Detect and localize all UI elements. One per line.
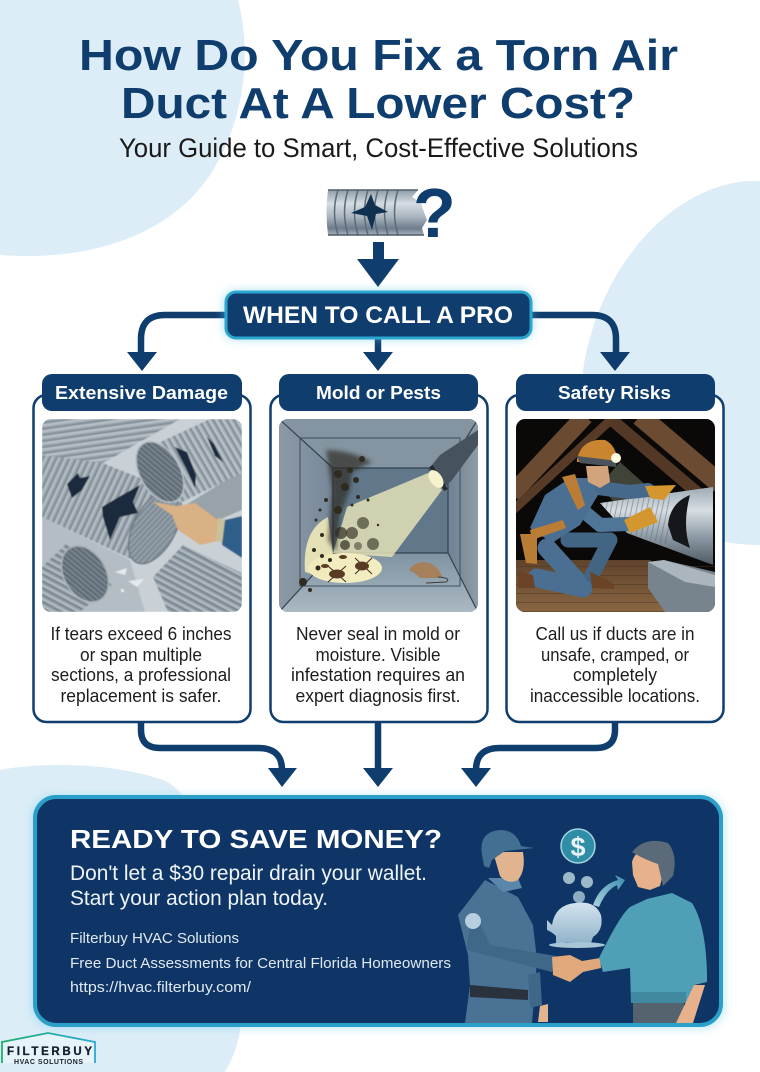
piggy bank (547, 902, 602, 946)
description: expert diagnosis first. (296, 685, 460, 706)
title: How Do You Fix a Torn Air (79, 31, 678, 80)
description (291, 623, 465, 706)
duct (600, 487, 713, 565)
header: extensive damage (42, 374, 242, 411)
homeowner (599, 893, 707, 1003)
illustration: torn ducts (42, 419, 242, 612)
header: safety risks (516, 374, 715, 411)
connectors: from pill to cards (127, 315, 630, 371)
connectors: from cards to banner (141, 722, 615, 787)
description (50, 623, 232, 706)
description: moisture. Visible (316, 644, 440, 665)
title (79, 31, 678, 128)
illustration: mold and pests in duct (279, 419, 478, 612)
illustration: technician and homeowner handshake: $ (570, 832, 586, 862)
logo: filterbuy hvac solutions: HVAC SOLUTIONS (14, 1059, 83, 1066)
technician (458, 880, 537, 1023)
handshake (552, 955, 601, 982)
description: infestation requires an (291, 664, 465, 685)
banner message: Don't let a $30 repair drain your wallet. (70, 862, 427, 885)
panel: safety risks (506, 374, 724, 722)
description: replacement is safer. (60, 685, 222, 706)
contact details: Free Duct Assessments for Central Florida Homeowners (70, 955, 451, 972)
logo: filterbuy hvac solutions (2, 1033, 95, 1066)
contact details (70, 930, 451, 996)
icon: torn duct with question mark (326, 174, 456, 252)
pill: when to call a pro: WHEN TO CALL A PRO (243, 302, 513, 329)
title: Duct At A Lower Cost? (121, 79, 635, 128)
logo: filterbuy hvac solutions: FILTERBUY (7, 1046, 92, 1058)
panel: extensive damage (34, 374, 250, 722)
header: safety risks: Safety Risks (558, 382, 671, 403)
hand (153, 502, 223, 545)
worker (537, 487, 648, 588)
box (648, 560, 715, 612)
panel: mold or pests (270, 374, 488, 722)
description: inaccessible locations. (530, 685, 700, 706)
pill: when to call a pro (224, 291, 532, 339)
contact details: Filterbuy HVAC Solutions (70, 930, 239, 947)
light beam (333, 473, 442, 557)
description: sections, a professional (51, 664, 231, 685)
icon: torn duct with question mark: ? (413, 174, 456, 252)
description: or span multiple (80, 644, 202, 665)
arrow: down to when to call a pro (357, 242, 399, 287)
banner heading: READY TO SAVE MONEY? (70, 824, 442, 854)
illustration: worker in attic (512, 416, 720, 612)
illustration: technician and homeowner handshake (458, 829, 707, 1023)
pests (328, 558, 372, 582)
coins (561, 829, 595, 863)
header: mold or pests (279, 374, 478, 411)
mold (299, 450, 379, 592)
rat (409, 562, 441, 578)
description (530, 623, 700, 706)
subtitle: Your Guide to Smart, Cost-Effective Solutions (119, 133, 638, 163)
flashlight (428, 430, 478, 488)
description: Call us if ducts are in (536, 623, 694, 644)
panel: ready to save money banner (32, 796, 724, 1028)
description: If tears exceed 6 inches (50, 623, 232, 644)
growth arrow (593, 875, 625, 907)
banner message: Start your action plan today. (70, 887, 328, 910)
header: mold or pests: Mold or Pests (316, 382, 441, 403)
banner message (70, 862, 427, 910)
header: extensive damage: Extensive Damage (55, 382, 228, 403)
description: completely (573, 664, 658, 685)
description: Never seal in mold or (296, 623, 460, 644)
contact details: https://hvac.filterbuy.com/ (70, 979, 252, 996)
description: unsafe, cramped, or (541, 644, 689, 665)
